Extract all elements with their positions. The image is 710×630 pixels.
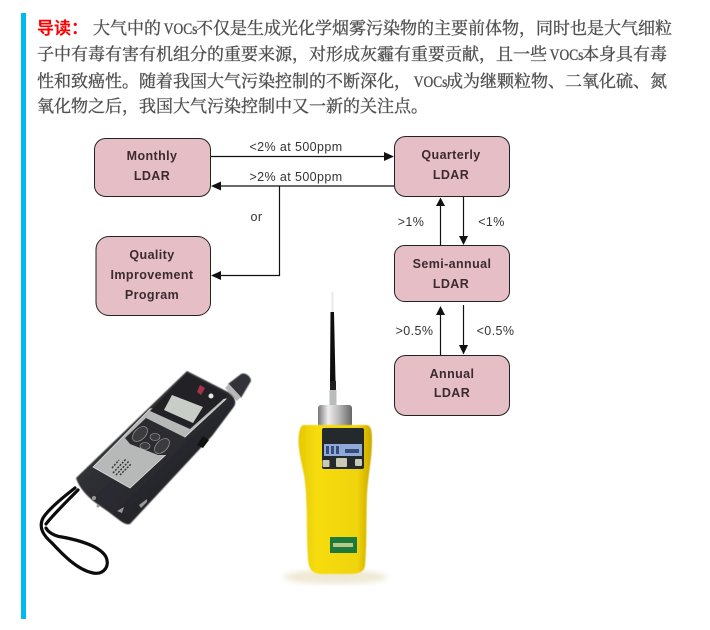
connector: monthly to quarterly bbox=[210, 152, 394, 161]
box: annual LDAR: LDAR bbox=[434, 386, 470, 400]
keypad panel bbox=[125, 418, 186, 455]
box: annual LDAR: Annual bbox=[430, 367, 474, 381]
intro text block: 大气中的 不仅是生成光化学烟雾污染物的主要前体物，同时也是大气细粒 bbox=[93, 19, 672, 38]
box: semi-annual LDAR: LDAR bbox=[433, 277, 469, 291]
condition labels: >2% at 500ppm bbox=[249, 170, 343, 184]
device body bbox=[76, 371, 235, 524]
intro text block: 氧化物之后，我国大气污染控制中又一新的关注点。 bbox=[37, 97, 428, 116]
indicator light bbox=[208, 394, 214, 398]
bottom end sockets bbox=[92, 496, 147, 513]
connector: semi-annual up to quarterly bbox=[436, 198, 445, 245]
connector: semi-annual down to annual bbox=[459, 305, 468, 354]
intro text block bbox=[37, 14, 672, 116]
LCD display bbox=[324, 444, 362, 456]
intro text block: VOCs bbox=[550, 47, 583, 64]
condition labels: >0.5% bbox=[396, 324, 433, 338]
condition labels: <1% bbox=[478, 215, 505, 229]
box: quarterly LDAR bbox=[394, 136, 510, 196]
silver face panel bbox=[93, 399, 226, 488]
connector: annual up to semi-annual bbox=[436, 306, 445, 355]
box: semi-annual LDAR bbox=[394, 246, 510, 302]
red indicator bbox=[197, 385, 205, 395]
condition labels bbox=[249, 140, 514, 338]
lanyard bbox=[41, 488, 107, 573]
intro text block: VOCs bbox=[414, 74, 447, 91]
box: monthly LDAR bbox=[94, 138, 210, 196]
icon: black handheld detector bbox=[41, 371, 251, 573]
sensor cap bbox=[225, 374, 251, 401]
yellow body bbox=[298, 425, 372, 574]
flow chart bbox=[94, 136, 514, 416]
panel buttons bbox=[322, 458, 362, 467]
box: quality improvement program bbox=[96, 236, 210, 316]
condition labels: >1% bbox=[398, 215, 424, 229]
green label highlight bbox=[333, 543, 353, 547]
intro text block: 导读： bbox=[37, 14, 88, 39]
connector: to quality improvement bbox=[211, 186, 280, 280]
intro text block: 子中有毒有害有机组分的重要来源，对形成灰霾有重要贡献，且一些 本身具有毒 bbox=[37, 45, 667, 64]
connector: quarterly to monthly bbox=[211, 182, 394, 190]
condition labels: <2% at 500ppm bbox=[249, 140, 343, 154]
box: quality improvement program: Improvement bbox=[111, 268, 194, 282]
intro text block: 性和致癌性。随着我国大气污染控制的不断深化， 成为继颗粒物、二氧化硫、氮 bbox=[37, 72, 667, 91]
box: quarterly LDAR: Quarterly bbox=[421, 148, 481, 162]
condition labels: <0.5% bbox=[477, 324, 514, 338]
box: monthly LDAR: Monthly bbox=[127, 149, 177, 163]
side bump bbox=[197, 436, 209, 448]
display screen bbox=[164, 395, 203, 423]
control panel bbox=[322, 428, 364, 469]
speaker grille bbox=[112, 459, 131, 475]
ground shadow bbox=[283, 570, 387, 584]
top black band bbox=[150, 373, 228, 429]
box: quality improvement program: Program bbox=[125, 288, 179, 302]
box: annual LDAR bbox=[394, 356, 510, 416]
intro text block: VOCs bbox=[164, 21, 197, 38]
box: quarterly LDAR: LDAR bbox=[433, 168, 469, 182]
icon: yellow PID detector bbox=[283, 292, 387, 584]
LCD reading bbox=[326, 446, 359, 454]
box: quality improvement program: Quality bbox=[129, 248, 175, 262]
box: semi-annual LDAR: Semi-annual bbox=[413, 257, 491, 271]
green label bbox=[330, 537, 357, 553]
condition labels: or bbox=[251, 210, 262, 224]
box: monthly LDAR: LDAR bbox=[134, 169, 170, 183]
antenna bbox=[330, 292, 336, 405]
accent bar bbox=[21, 13, 26, 619]
metal collar bbox=[318, 405, 352, 427]
connector: quarterly down to semi-annual bbox=[459, 197, 468, 245]
keypad buttons bbox=[130, 424, 172, 456]
